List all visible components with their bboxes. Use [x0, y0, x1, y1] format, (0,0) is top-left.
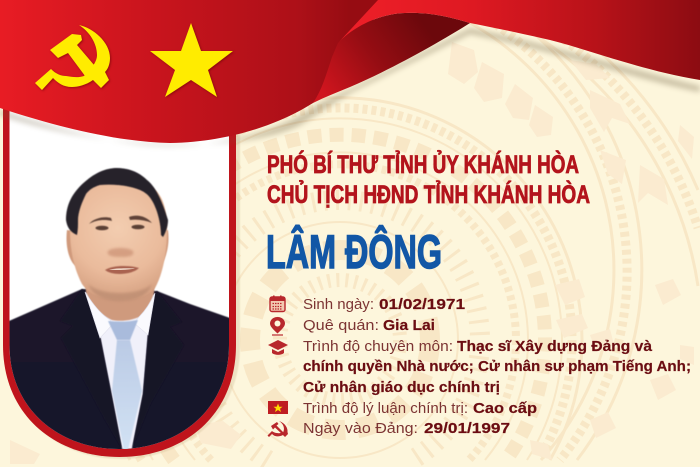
icon: calendar [270, 296, 285, 312]
birth date [303, 296, 465, 313]
chin shadow [90, 286, 150, 301]
party admission date [303, 420, 510, 437]
ribbon shadow [0, 28, 700, 146]
party admission date: 29/01/1997 [424, 420, 510, 437]
neck [85, 288, 155, 322]
qualifications: Trình độ chuyên môn: [303, 338, 453, 355]
collar [85, 292, 155, 338]
ears [66, 230, 169, 266]
lapels [60, 289, 184, 449]
ribbon: dark fold [313, 13, 470, 103]
portrait frame [3, 100, 240, 459]
icon: hammer and sickle [35, 25, 110, 90]
hair [66, 168, 168, 237]
heading: position: CHỦ TỊCH HĐND TỈNH KHÁNH HÒA [267, 179, 590, 209]
eyes [96, 225, 144, 230]
frame shadow [5, 120, 240, 459]
hometown: Quê quán: [303, 317, 379, 334]
mouth [105, 266, 139, 274]
suit [9, 289, 230, 450]
birth date: 01/02/1971 [379, 296, 465, 313]
hometown [303, 317, 435, 334]
icon: map pin [270, 317, 285, 335]
icon: flag [268, 401, 288, 414]
biography details [303, 296, 691, 437]
icon: small hammer and sickle [268, 421, 288, 437]
qualifications: Thạc sĩ Xây dựng Đảng và [457, 338, 653, 355]
nose [108, 248, 133, 257]
tie [108, 320, 142, 450]
heading: position [267, 149, 590, 209]
ribbon: main left section [0, 0, 380, 143]
qualifications [303, 338, 691, 396]
hometown: Gia Lai [383, 317, 435, 334]
heading: position: PHÓ BÍ THƯ TỈNH ỦY KHÁNH HÒA [267, 149, 579, 179]
party admission date: Ngày vào Đảng: [303, 420, 418, 437]
shirt [85, 292, 155, 449]
political theory: Trình độ lý luận chính trị: [303, 400, 468, 417]
qualifications: Cử nhân giáo dục chính trị [303, 379, 500, 396]
eyebrows [89, 216, 152, 224]
frame border [3, 100, 236, 457]
icon: graduation cap [268, 340, 288, 355]
frame interior [10, 100, 229, 449]
qualifications: chính quyền Nhà nước; Cử nhân sư phạm Tiếng Anh; [303, 358, 691, 375]
portrait photo [9, 168, 230, 450]
heading: name: LÂM ĐÔNG [266, 225, 442, 278]
ribbon: right section [338, 0, 700, 80]
face [70, 178, 167, 300]
political theory: Cao cấp [473, 400, 537, 417]
icon: yellow star [150, 23, 233, 97]
red ribbon banner [0, 0, 700, 143]
birth date: Sinh ngày: [303, 296, 374, 313]
